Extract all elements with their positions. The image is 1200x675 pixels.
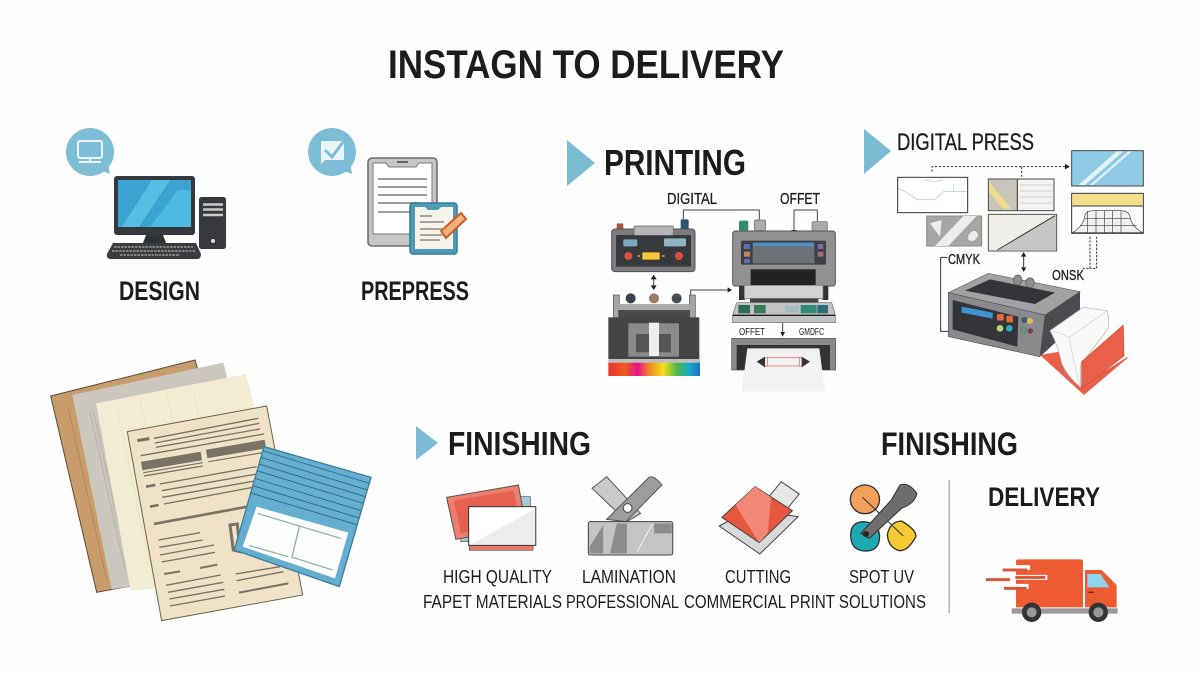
panel: delivery [986, 482, 1118, 622]
panel: finishing [416, 425, 1018, 612]
panel: prepress [308, 128, 469, 306]
diagram: digital press [898, 151, 1143, 395]
icon: design speech bubble [66, 128, 114, 176]
caption row 2: PROFESSIONAL [566, 591, 679, 612]
caption row 1: CUTTING [725, 566, 791, 587]
digital device [612, 219, 695, 272]
output tray with paper [732, 338, 836, 392]
label: offet: OFFET [780, 191, 820, 208]
heading: finishing second: FINISHING [881, 426, 1018, 462]
caption row 2 [423, 591, 926, 612]
panel: printing [567, 140, 836, 392]
icon: finishing arrow [416, 426, 438, 460]
heading: finishing: FINISHING [448, 425, 591, 462]
title: INSTAGN TO DELIVERY [388, 43, 784, 87]
icon: desktop computer [107, 176, 226, 259]
panel: digital press [864, 129, 1143, 395]
blue card [234, 447, 371, 587]
caption row 1 [443, 566, 915, 587]
icon: printing arrow [567, 140, 595, 186]
label: design: DESIGN [119, 276, 200, 306]
illustration: paper stack [51, 360, 371, 621]
icon: cutting [719, 482, 799, 554]
inkjet unit with colour strip [608, 293, 700, 376]
label: onsk: ONSK [1052, 268, 1084, 284]
document sheet [127, 406, 303, 621]
icon: lamination [588, 477, 673, 555]
heading: printing: PRINTING [604, 142, 746, 183]
caption row 1: HIGH QUALITY [443, 566, 552, 587]
offset press [733, 220, 835, 323]
diagram: printing machines [608, 210, 836, 392]
icon: digital press arrow [864, 129, 891, 174]
label: digital: DIGITAL [667, 191, 717, 208]
icon: delivery truck [986, 559, 1118, 622]
label: gmdfc small: GMDFC [799, 326, 824, 338]
label: prepress: PREPRESS [361, 276, 469, 306]
label: cmyk: CMYK [948, 252, 980, 268]
folded paper output [1040, 307, 1128, 395]
digital press machine [948, 273, 1080, 357]
print samples [898, 151, 1143, 251]
caption row 1: LAMINATION [582, 566, 676, 587]
icon: tablet and clipboard [368, 158, 466, 254]
icon: spot uv [850, 484, 917, 551]
panel: design [66, 128, 226, 306]
label: offet small: OFFET [739, 326, 765, 338]
caption row 2: FAPET MATERIALS [423, 591, 562, 612]
heading: digital press: DIGITAL PRESS [897, 129, 1034, 156]
caption row 2: COMMERCIAL PRINT SOLUTIONS [684, 591, 926, 612]
icon: high quality paper [447, 485, 536, 550]
heading: delivery: DELIVERY [988, 482, 1100, 512]
caption row 1: SPOT UV [849, 566, 915, 587]
icon: prepress speech bubble [308, 128, 356, 176]
